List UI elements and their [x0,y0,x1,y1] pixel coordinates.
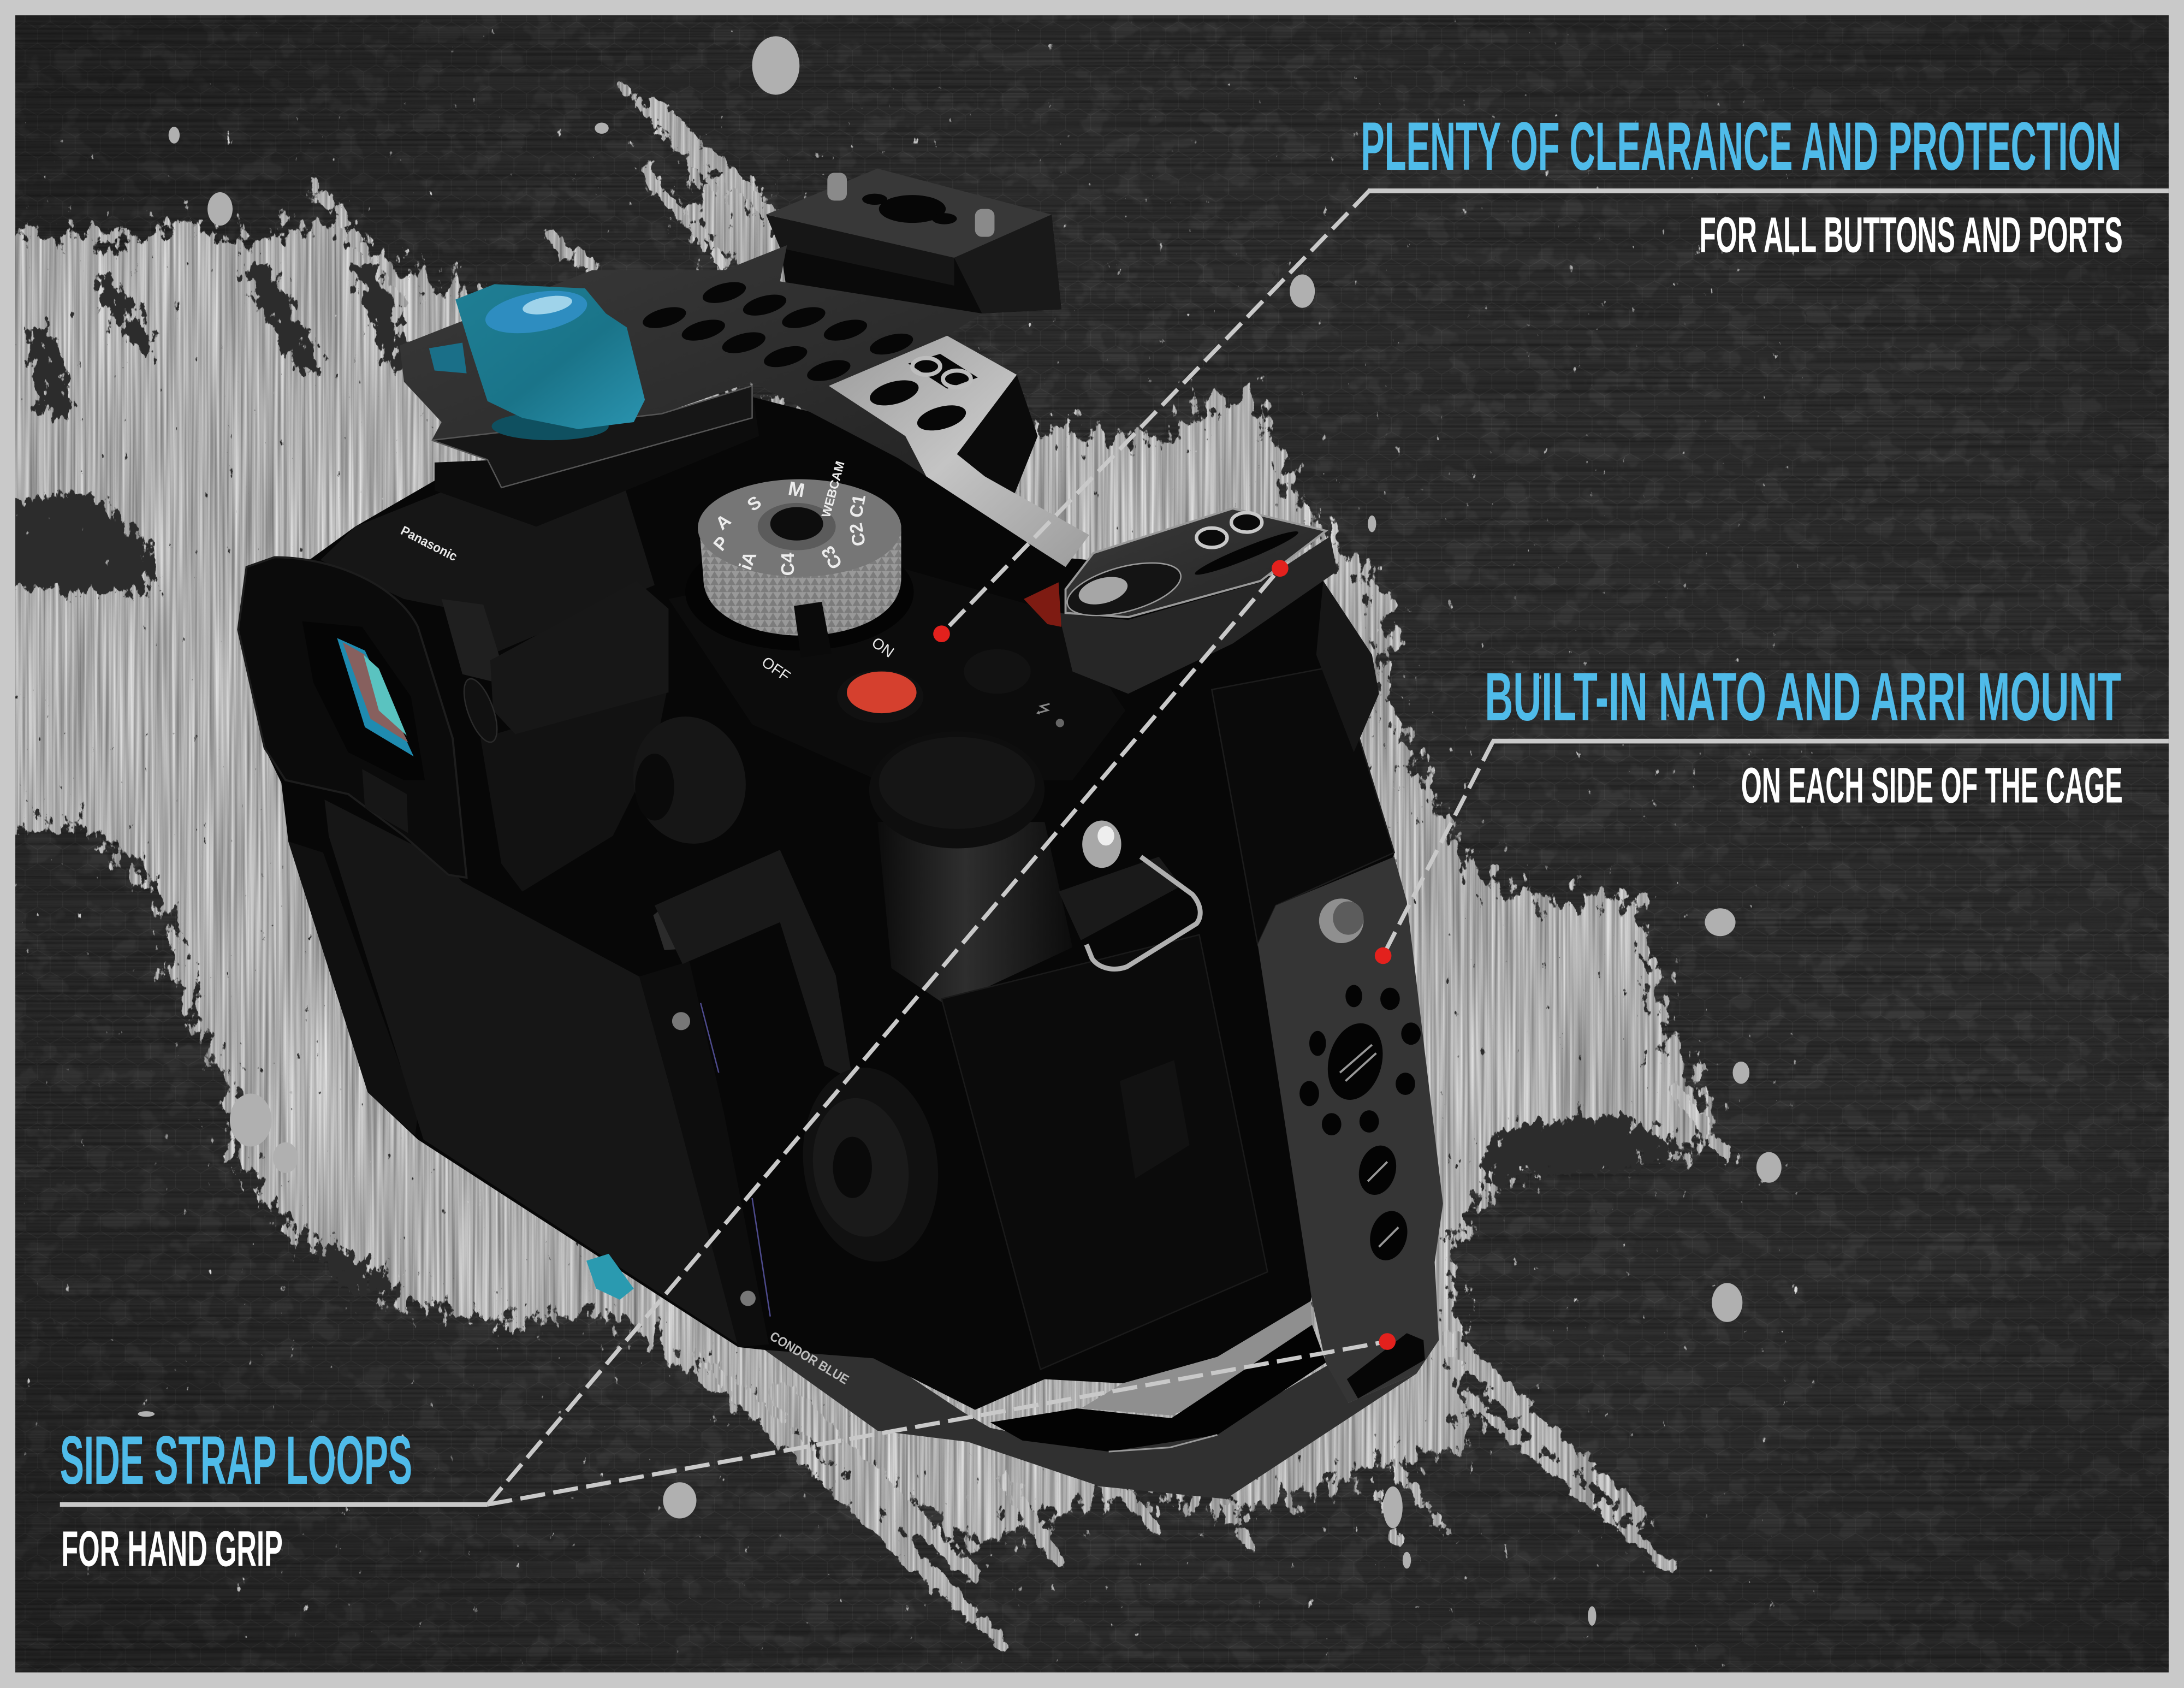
strap lug and ring [1082,821,1200,969]
mode dial labels: C3 [817,542,847,572]
callout: NATO and ARRI mount [1485,659,2169,813]
strap tab [1059,857,1181,940]
callout: clearance and protection [1361,109,2169,263]
lever clamp plate [432,386,752,488]
top mount right side [954,215,1061,313]
arm end rings [1196,513,1262,548]
strap gap crescent [1081,1301,1312,1415]
left lever small teal part [429,343,467,374]
diopter wheel [458,675,504,746]
mode dial labels: C4 [778,552,798,576]
viewfinder lens [337,638,414,756]
lever glass top [482,284,590,340]
screen screw lower [740,1290,756,1306]
top mount pins [827,173,994,237]
rosette mount holes [1299,985,1421,1265]
teal lever knob [455,284,645,429]
bottom teal screw [586,1254,634,1300]
black area behind cage top [957,375,1038,499]
cage top plate [400,245,982,476]
Panasonic logo: Panasonic [398,523,460,564]
textured patch [442,599,508,685]
leader: strap loop lower [488,1342,1387,1505]
mode dial labels: S [744,492,765,516]
mode dial top [698,479,901,577]
large top knob [869,731,1072,1006]
mode dial labels: WEBCAM [818,459,847,519]
grip shoulder [1316,581,1379,753]
OFF label: OFF [758,653,793,685]
rule [1492,739,2169,743]
grip band [1212,666,1394,945]
rule [60,1502,488,1507]
viewfinder body [321,448,655,655]
dial lever [794,602,832,658]
grey side cage plate [1258,857,1443,1403]
hole thread highlights [1340,1045,1398,1247]
bottom slot shadow band [990,1325,1326,1452]
top mount front [766,215,954,286]
mode dial labels: A [712,510,735,534]
left control knob [619,704,760,856]
heading: SIDE STRAP LOOPS [60,1423,412,1499]
usb icon: ⭍ [1033,698,1054,721]
battery door latch [1120,1060,1190,1178]
cage bottom plate [765,1350,1416,1499]
subheading: FOR HAND GRIP [61,1521,283,1577]
mode dial centre [758,503,836,550]
paint splash and texture layers [0,84,1727,1644]
cage plate holes [640,278,915,385]
screen hinge grey corner [653,901,706,950]
camera and cage product illustration [238,169,1443,1499]
brand on bottom plate: CONDOR BLUE [767,1329,851,1388]
dial base shadow [685,534,913,650]
mode dial labels: C2 [846,522,870,548]
camera body silhouette [238,397,1394,1410]
mode dial labels: iA [735,549,761,573]
mode dial labels: C1 [846,493,870,519]
top mount screw hole [862,194,957,224]
darker patches inside splash [0,258,1699,1295]
LCD flip screen [324,799,738,1345]
callout: side strap loops [60,1423,488,1577]
silver arm double ring [912,358,971,387]
rear control dial [791,1059,950,1270]
sensor window [362,769,408,833]
side pin [1319,898,1363,943]
small black button [964,649,1031,694]
leader: clearance [941,191,1369,634]
top deck [668,557,1125,780]
arm end slot [1192,526,1301,580]
rule [1368,188,2169,193]
mode dial labels [710,459,870,576]
eye cup [238,557,467,878]
top mount upper face [766,169,1052,258]
purple edge light [701,1003,770,1317]
arm end top [1066,508,1326,617]
viewfinder side barrel [490,581,668,734]
red button behind arm [1024,582,1061,627]
silver handle arm [829,336,1089,567]
side bracket [655,850,852,1080]
leader: mount [1383,741,1493,956]
lever base [492,412,609,440]
red callout dots [933,560,1396,1350]
ON label: ON [869,634,897,661]
highlight arc on plate [1109,1435,1218,1452]
top mount base block [780,215,1061,313]
paint splash behind camera [0,153,1727,1547]
leader: strap loop upper [488,568,1280,1505]
mode dial labels: P [710,532,733,555]
viewfinder eyepiece recess [302,621,425,780]
screen screw [672,1012,690,1030]
mode dial knurled side [699,497,901,636]
shoe base [435,390,759,526]
screen corner mount [639,961,769,1347]
arm end lower [1059,536,1337,694]
strap slot [1347,1333,1425,1399]
callout leader lines [488,191,1493,1505]
flip screen hinge strip [288,842,418,1135]
silver arm holes [867,354,978,435]
status led [1056,719,1064,727]
mode dial labels: M [787,477,806,502]
brush strokes around splash [313,84,1727,1644]
record button [837,670,923,723]
arm end lens [1062,553,1186,626]
paint splatters [138,36,1782,1626]
battery door [941,935,1267,1370]
rear panel below barrel [480,683,668,892]
